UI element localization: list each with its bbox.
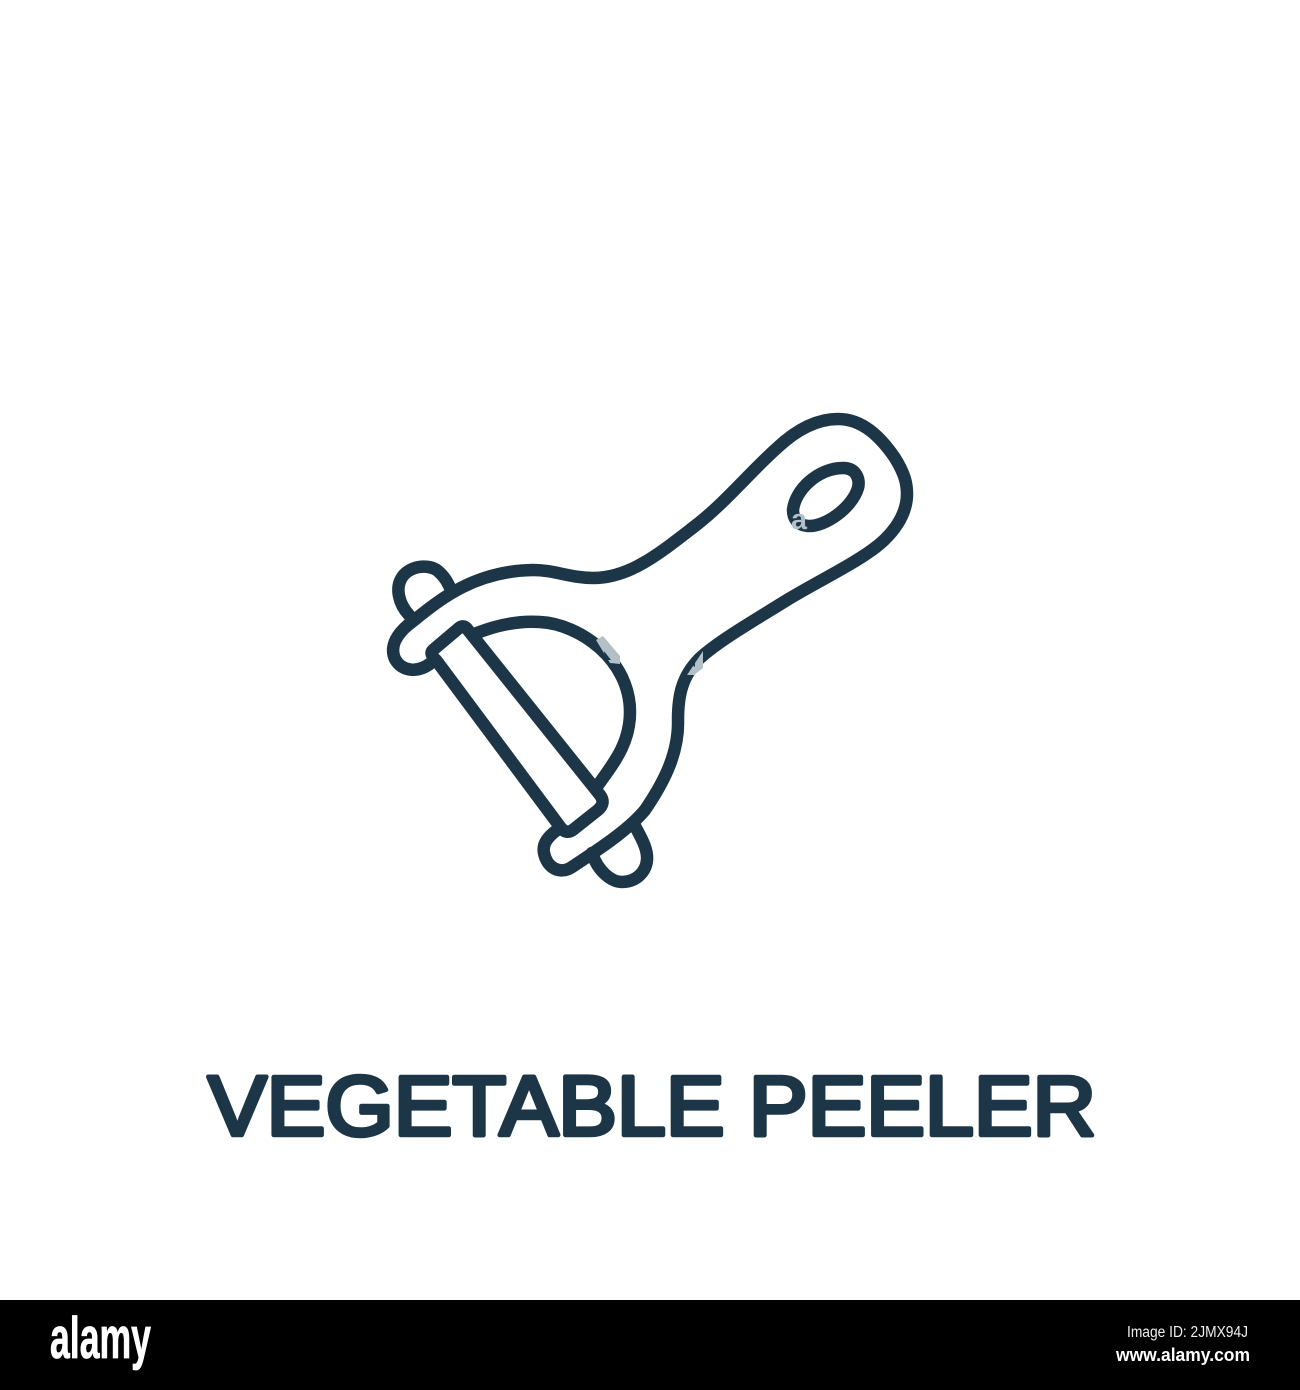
- footer logo: alamy: [50, 1306, 151, 1371]
- title: VEGETABLE PEELER: [208, 1059, 1096, 1153]
- footer bar: [0, 1300, 1300, 1390]
- watermark fragments on the icon: [596, 504, 808, 675]
- website: www.alamy.com: [1115, 1345, 1250, 1365]
- icon: vegetable peeler: [393, 419, 907, 882]
- watermark fragments on the icon: a: [791, 504, 808, 536]
- image id: Image ID: 2JMX94J: [1127, 1324, 1248, 1341]
